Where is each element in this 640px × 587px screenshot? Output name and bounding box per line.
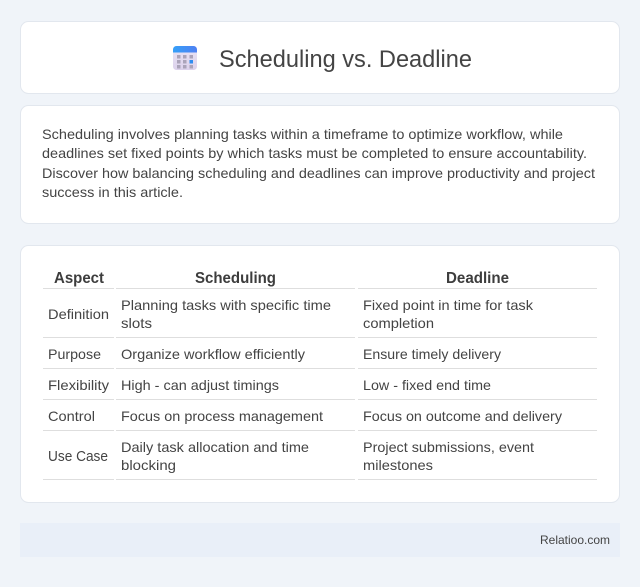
- table row: definition: [43, 297, 597, 338]
- text block: introduction: Discover how balancing scheduling and deadlines can improve productivity and project: [42, 165, 595, 181]
- table header row: [43, 270, 597, 289]
- table row: purpose: Purpose: [48, 346, 101, 362]
- table header row: Scheduling: [195, 270, 276, 287]
- table row: use case: [43, 439, 597, 480]
- table row: purpose: Ensure timely delivery: [363, 346, 501, 362]
- table row: definition: Definition: [48, 306, 109, 322]
- table row: control: Focus on process management: [121, 408, 323, 424]
- footer: Relatioo.com: [540, 533, 610, 547]
- panel: header: [20, 22, 620, 94]
- table row: use case: milestones: [363, 457, 433, 473]
- panel: introduction: [20, 106, 620, 224]
- panel: comparison table: [20, 246, 620, 502]
- table row: purpose: Organize workflow efficiently: [121, 346, 305, 362]
- table header row: Aspect: [54, 270, 104, 287]
- table row: flexibility: High - can adjust timings: [121, 377, 279, 393]
- footer: [20, 523, 620, 557]
- table row: flexibility: Flexibility: [48, 377, 109, 393]
- table row: definition: completion: [363, 315, 434, 331]
- table row: use case: blocking: [121, 457, 176, 473]
- table row: use case: Project submissions, event: [363, 439, 534, 455]
- text block: introduction: success in this article.: [42, 184, 183, 200]
- table row: purpose: [43, 346, 597, 369]
- text block: introduction: deadlines set fixed points by which tasks must be completed to ensure accountability.: [42, 145, 587, 161]
- text block: introduction: [42, 126, 595, 200]
- table row: definition: Fixed point in time for task: [363, 297, 534, 313]
- table row: flexibility: Low - fixed end time: [363, 377, 491, 393]
- table row: definition: Planning tasks with specific time: [121, 297, 331, 313]
- table header row: Deadline: [446, 270, 509, 287]
- title: Scheduling vs. Deadline: [219, 46, 472, 73]
- icon: calendar: [173, 46, 197, 70]
- text block: introduction: Scheduling involves planning tasks within a timeframe to optimize workflow, while: [42, 126, 563, 142]
- table row: use case: Use Case: [48, 449, 108, 465]
- table row: use case: Daily task allocation and time: [121, 439, 309, 455]
- table row: definition: slots: [121, 315, 152, 331]
- table row: control: [43, 408, 597, 431]
- table row: control: Focus on outcome and delivery: [363, 408, 562, 424]
- table row: control: Control: [48, 408, 95, 424]
- table row: flexibility: [43, 377, 597, 400]
